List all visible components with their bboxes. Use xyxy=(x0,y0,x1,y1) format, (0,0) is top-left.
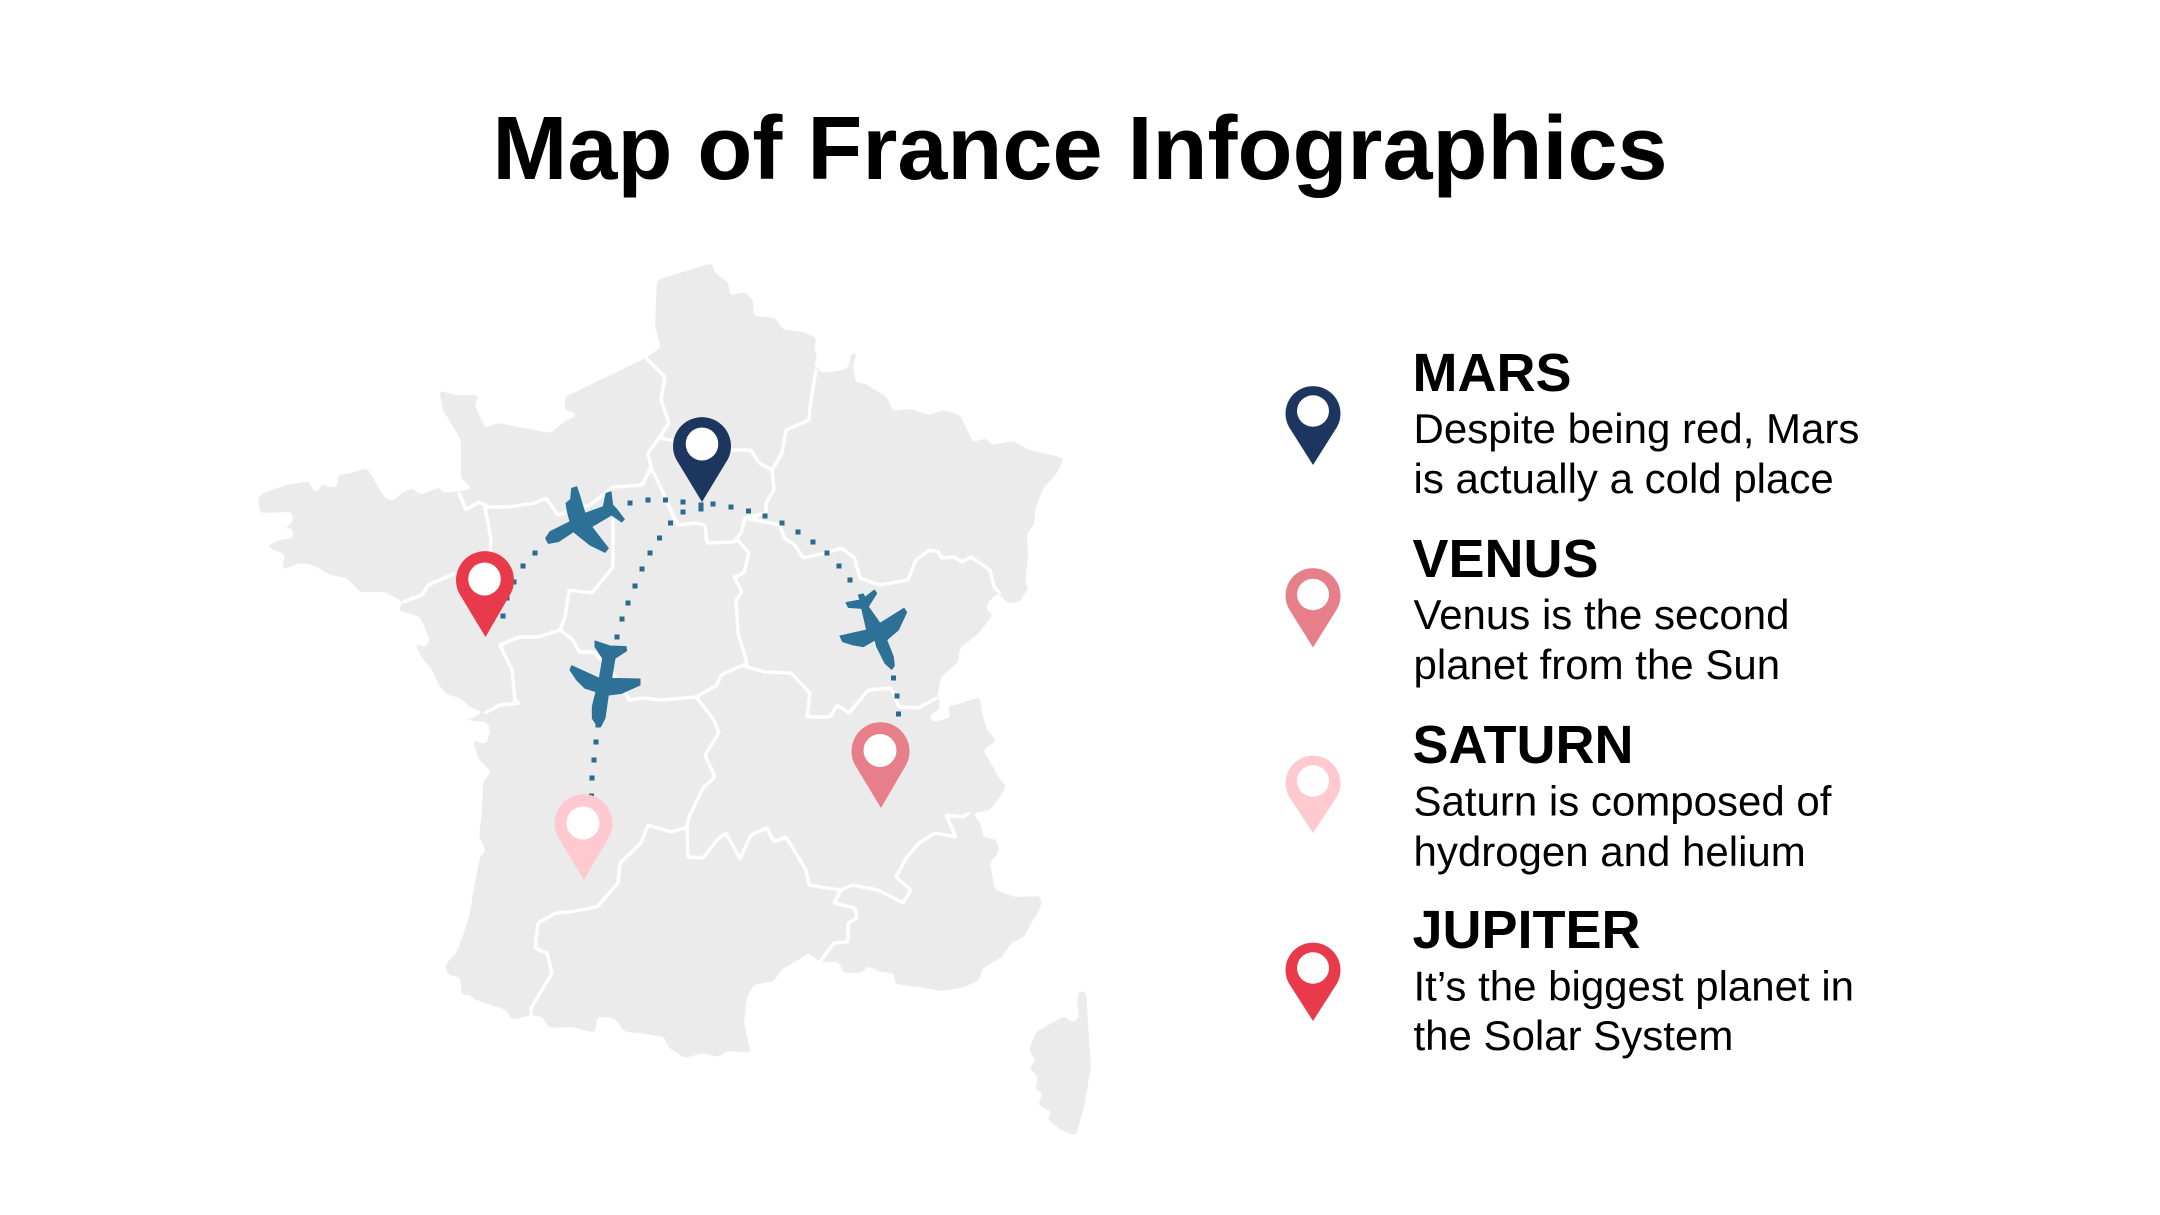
heading: Jupiter: JUPITER xyxy=(1412,900,1641,960)
text: Venus description: planet from the Sun xyxy=(1414,641,1780,688)
legend item: Jupiter xyxy=(1286,900,1854,1059)
plane: Mars to Saturn route xyxy=(570,641,640,727)
legend item: Mars xyxy=(1286,343,1859,502)
text: Jupiter description: It’s the biggest planet in xyxy=(1414,962,1854,1010)
pin: Saturn on map xyxy=(554,794,612,880)
text: Saturn description: Saturn is composed of xyxy=(1414,778,1832,824)
pin: Mars on map xyxy=(673,417,731,502)
legend item: Saturn xyxy=(1286,715,1832,875)
heading: Venus: VENUS xyxy=(1412,529,1599,589)
text: Mars description: Despite being red, Mars xyxy=(1414,405,1859,452)
plane: Mars to Venus route xyxy=(840,590,907,669)
text: Mars description: is actually a cold place xyxy=(1414,455,1834,502)
heading: Saturn: SATURN xyxy=(1412,715,1633,775)
heading: Mars: MARS xyxy=(1412,343,1572,403)
legend xyxy=(1286,343,1859,1059)
plane: Jupiter to Mars route xyxy=(546,487,624,552)
icon: Saturn pin xyxy=(1286,756,1340,833)
legend item: Venus xyxy=(1286,529,1789,688)
dotted flight routes xyxy=(503,500,899,796)
icon: Venus pin xyxy=(1286,568,1340,648)
text: Jupiter description: the Solar System xyxy=(1414,1012,1733,1059)
pin: Jupiter on map xyxy=(456,551,514,637)
icon: Jupiter pin xyxy=(1286,943,1340,1021)
title: Map of France Infographics xyxy=(492,99,1668,199)
mainland France silhouette xyxy=(258,263,1064,1058)
pin: Venus on map xyxy=(852,722,910,808)
Corsica xyxy=(1029,990,1091,1136)
icon: Mars pin xyxy=(1286,386,1340,465)
map of France xyxy=(258,263,1091,1136)
text: Venus description: Venus is the second xyxy=(1414,591,1789,638)
text: Saturn description: hydrogen and helium xyxy=(1414,828,1806,875)
